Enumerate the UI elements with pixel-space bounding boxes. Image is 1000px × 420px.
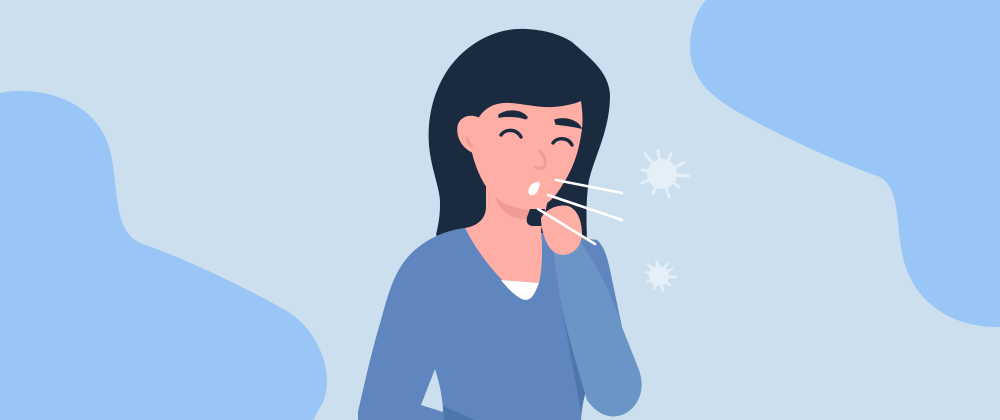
hair (429, 29, 610, 262)
sleeve: forearm (553, 241, 642, 416)
blob: top right (690, 0, 1000, 327)
left eyebrow (499, 111, 527, 119)
sleeve: upper arm (578, 238, 622, 327)
right eye (553, 139, 572, 145)
sweater body (358, 228, 610, 420)
blob: left (0, 91, 327, 420)
sweater: lower hem shade (443, 406, 475, 420)
chin shadow (495, 197, 530, 219)
mouth (528, 182, 540, 195)
cough lines (538, 180, 622, 244)
ear (457, 116, 480, 153)
icon: large virus (642, 151, 688, 197)
face (472, 101, 582, 210)
left eye (501, 130, 521, 137)
hand (541, 206, 582, 255)
icon: small virus (646, 262, 676, 291)
sweater: fold shade (560, 297, 585, 412)
ear inner (467, 138, 474, 148)
neck and chest (465, 180, 548, 283)
right eyebrow (555, 119, 581, 128)
dark gap under chin (527, 209, 545, 226)
woman figure (358, 29, 642, 420)
undershirt (501, 280, 539, 300)
nose (535, 151, 545, 168)
